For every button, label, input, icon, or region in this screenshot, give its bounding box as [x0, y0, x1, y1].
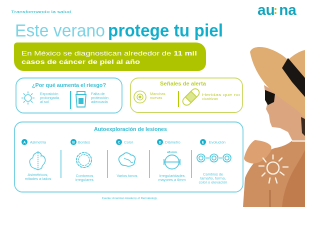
item: asymmetry: Asimetría [30, 140, 47, 144]
item: diameter: Irregularidades [159, 174, 185, 178]
item: borders: Bordes [78, 140, 90, 144]
hand [244, 140, 271, 164]
back and shoulder [243, 140, 305, 207]
tagline: Transformando la salud [11, 9, 71, 14]
text: protection: Falta de [91, 92, 105, 96]
item: asymmetry: A [23, 140, 26, 144]
spine shadow [269, 190, 271, 207]
item: borders [70, 139, 94, 182]
text: sun exposure [40, 92, 60, 104]
heading: risk: ¿Por qué aumenta el riesgo? [32, 83, 106, 89]
item: diameter [157, 139, 186, 182]
item: evolution: color o elevación [199, 180, 227, 184]
icon: bandage [181, 87, 201, 107]
sun drawn in cream [259, 155, 288, 183]
item: borders: Contornos [76, 174, 93, 178]
text: protection [91, 92, 109, 104]
item: evolution: Evolución [209, 140, 225, 144]
icon: sun [22, 92, 34, 104]
title [15, 20, 223, 40]
text: wounds [202, 93, 240, 101]
item: color: C [118, 140, 121, 144]
item: evolution [197, 139, 231, 184]
text: spots: nuevas [150, 96, 162, 100]
item: asymmetry: Asimétricos, [28, 173, 48, 177]
panel: risk factors [16, 78, 122, 113]
hair [301, 117, 305, 136]
text: spots: Manchas [150, 92, 166, 96]
item: evolution: tamaño, forma, [200, 176, 226, 180]
item: color [116, 139, 138, 178]
text: sun exposure: Exposición [40, 92, 58, 96]
item: diameter: D [159, 140, 162, 144]
text: protection: protección [91, 96, 109, 100]
item: asymmetry: mitades a lados [25, 177, 51, 181]
hat [250, 47, 305, 118]
icon: spot [134, 91, 146, 103]
item: borders: B [72, 140, 75, 144]
item: diameter: ≥6 mm [167, 150, 177, 154]
item: diameter: Diámetro [165, 140, 180, 144]
source note: Fuente: American Academy of Dermatology [102, 196, 158, 200]
item: diameter: mayores a 6mm [158, 178, 186, 182]
strap [292, 140, 305, 142]
title: Este verano [15, 20, 105, 40]
heading: self-examination: Autoexploración de lesiones [94, 127, 167, 133]
banner: statistic [14, 42, 206, 71]
hat band [282, 58, 305, 97]
text: wounds: cicatrizan [202, 97, 218, 101]
text: spots [150, 92, 166, 100]
item: color: Color [124, 140, 134, 144]
panel: self-examination [14, 122, 243, 192]
text: wounds: Heridas que no [202, 93, 240, 97]
text: sun exposure: al sol [40, 100, 49, 104]
title: protege tu piel [108, 20, 223, 40]
text: protection: adecuada [91, 100, 109, 104]
logo: auna: au na [258, 2, 297, 19]
banner: statistic: En México se diagnostican alrededor de 11 mil [22, 51, 197, 58]
sunglasses [265, 90, 275, 105]
heading: warning signs: Señales de alerta [160, 82, 206, 88]
item: color: Varios tonos [117, 174, 138, 178]
banner: statistic: casos de cáncer de piel al año [22, 59, 140, 66]
text: sun exposure: prolongada [40, 96, 60, 100]
panel: warning signs [130, 78, 242, 112]
item: asymmetry [22, 139, 51, 181]
item: borders: irregulares [76, 178, 94, 182]
item: evolution: Cambios de [203, 172, 223, 176]
back shadow [282, 150, 305, 207]
icon: sunscreen [76, 92, 86, 107]
face and neck [264, 85, 305, 142]
photo: woman with hat and sun drawn on shoulder [243, 47, 305, 207]
item: evolution: E [202, 140, 205, 144]
